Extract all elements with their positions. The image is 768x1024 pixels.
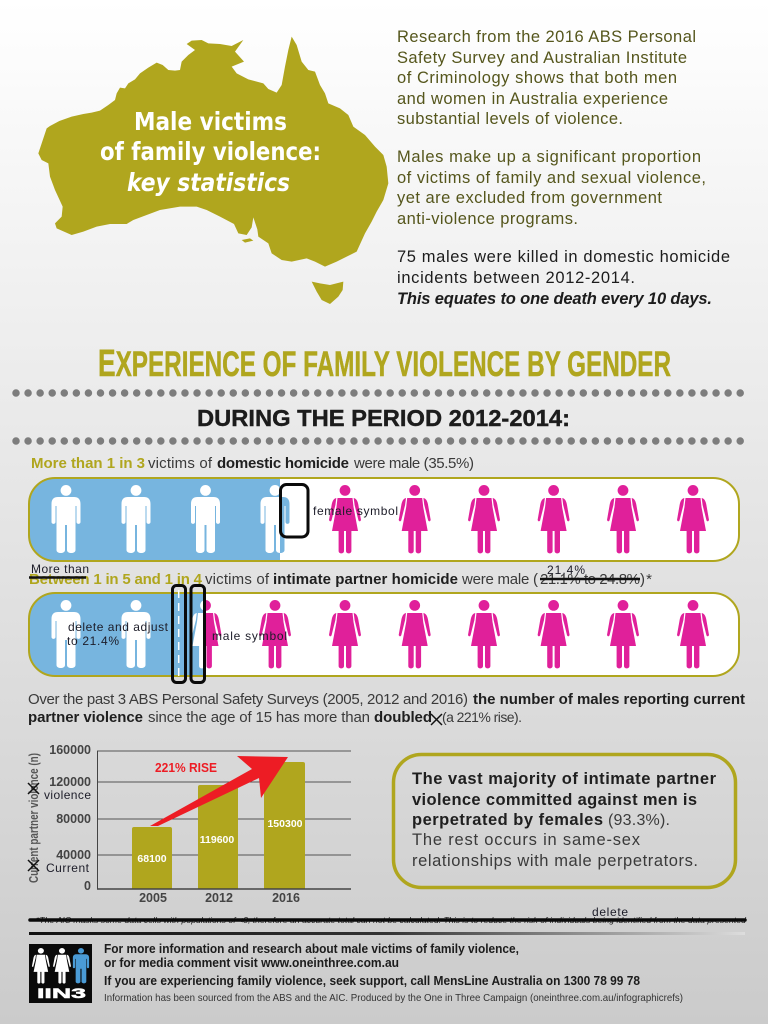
arrow: rise bbox=[150, 756, 288, 826]
paragraph: research: Safety Survey and Australian Institute bbox=[397, 49, 687, 67]
footer text: If you are experiencing family violence, seek support, call MensLine Australia on 1300 78 99 78 bbox=[104, 974, 640, 988]
statement: domestic homicide: were male (35.5%) bbox=[353, 455, 474, 472]
annotation: male symbol: male symbol bbox=[212, 629, 287, 643]
paragraph: research: substantial levels of violence. bbox=[397, 110, 623, 128]
text block: partner violence trend: doubled bbox=[374, 709, 432, 726]
statement: intimate partner homicide: 21.1% to 24.8% bbox=[540, 571, 640, 588]
footer text: or for media comment visit www.oneinthree.com.au bbox=[104, 956, 399, 970]
title: key statistics bbox=[127, 168, 290, 197]
annotation: delete and adjust: to 21.4% bbox=[67, 634, 119, 648]
paragraph: homicide statistic: 75 males were killed in domestic homicide bbox=[397, 248, 730, 266]
paragraph: homicide statistic bbox=[397, 248, 730, 308]
bars bbox=[132, 762, 305, 889]
y axis labels: 160000 bbox=[49, 743, 91, 757]
logo: One in Three bbox=[29, 944, 92, 1003]
statement: intimate partner homicide bbox=[29, 562, 652, 588]
paragraph: males: yet are excluded from government bbox=[397, 189, 662, 207]
paragraph: homicide statistic: This equates to one death every 10 days. bbox=[397, 290, 712, 308]
map of Australia with title bbox=[38, 37, 388, 304]
statement: domestic homicide: domestic homicide bbox=[217, 455, 349, 472]
y axis title: Current partner violence (n) bbox=[27, 753, 41, 883]
statement: intimate partner homicide: victims of bbox=[205, 571, 270, 588]
paragraph: males bbox=[397, 148, 706, 228]
footer text bbox=[104, 942, 683, 1004]
bar chart: current partner violence bbox=[27, 743, 351, 905]
logo wordmark: IIN3 bbox=[37, 985, 86, 1001]
annotation: delete and adjust: delete and adjust bbox=[68, 620, 169, 634]
x axis labels: 2012 bbox=[205, 891, 233, 905]
annotation: More than: More than bbox=[31, 562, 89, 576]
statement: intimate partner homicide: )* bbox=[640, 571, 652, 588]
title: of family violence: bbox=[100, 137, 321, 166]
panel: domestic homicide pictogram bbox=[29, 478, 739, 561]
y axis labels: 0 bbox=[84, 879, 91, 893]
callout: perpetrators: perpetrated by females bbox=[412, 811, 603, 829]
y axis labels bbox=[49, 743, 91, 893]
icon: Australia map bbox=[38, 37, 388, 304]
paragraph: research bbox=[397, 28, 696, 128]
x axis labels: 2005 bbox=[139, 891, 167, 905]
paragraph: research: of Criminology shows that both men bbox=[397, 69, 677, 87]
statement: domestic homicide bbox=[31, 455, 474, 472]
annotation: female symbol: female symbol bbox=[313, 504, 398, 518]
callout: perpetrators: relationships with male perpetrators. bbox=[412, 852, 698, 870]
icons: female figures bbox=[329, 485, 709, 553]
heading: during the period: DURING THE PERIOD 2012-2014: bbox=[197, 405, 570, 431]
icon: female figures bbox=[32, 948, 71, 984]
panel: intimate partner homicide pictogram bbox=[29, 586, 739, 682]
callout: perpetrators bbox=[394, 754, 736, 888]
paragraph: males: anti-violence programs. bbox=[397, 210, 578, 228]
mark: crosses bbox=[28, 783, 39, 871]
paragraph: research: and women in Australia experience bbox=[397, 90, 668, 108]
paragraph: homicide statistic: incidents between 2012-2014. bbox=[397, 269, 635, 287]
paragraph: males: Males make up a significant proportion bbox=[397, 148, 701, 166]
paragraph: males: of victims of family and sexual violence, bbox=[397, 169, 706, 187]
annotation: delete and adjust bbox=[67, 620, 169, 648]
label: 221% rise: 221% RISE bbox=[155, 761, 217, 775]
annotation box bbox=[280, 484, 308, 537]
annotation boxes bbox=[172, 586, 204, 682]
intro text block bbox=[397, 28, 730, 308]
paragraph: research: Research from the 2016 ABS Personal bbox=[397, 28, 696, 46]
statement: domestic homicide: More than 1 in 3 bbox=[31, 455, 145, 472]
x axis labels: 2016 bbox=[272, 891, 300, 905]
statement: intimate partner homicide: intimate partner homicide bbox=[273, 571, 458, 588]
y axis labels: 120000 bbox=[49, 775, 91, 789]
grid lines bbox=[97, 751, 351, 855]
annotation: delete: delete bbox=[592, 905, 628, 919]
text block: partner violence trend: partner violence bbox=[28, 709, 143, 726]
text block: partner violence trend bbox=[28, 691, 745, 726]
footnote, struck through bbox=[30, 905, 746, 925]
bar values bbox=[137, 818, 303, 865]
icons: male figures bbox=[52, 590, 203, 676]
bar values: 119600 bbox=[200, 834, 234, 846]
title: Male victims bbox=[134, 107, 287, 136]
icons: male figures bbox=[52, 485, 290, 553]
bar values: 150300 bbox=[267, 818, 303, 830]
annotation: Current: Current bbox=[46, 861, 90, 875]
footnote, struck through: *The AIC masks some data cells with populations of <3, therefore an accurate total can not be calculated. This is to reduce the risk of individuals being identified from the data presented bbox=[36, 915, 746, 925]
footer text: For more information and research about male victims of family violence, bbox=[104, 942, 519, 956]
callout: perpetrators: (93.3%). bbox=[608, 812, 670, 829]
callout: perpetrators: The rest occurs in same-sex bbox=[412, 831, 641, 849]
text block: partner violence trend: since the age of 15 has more than bbox=[148, 709, 370, 726]
footer text: Information has been sourced from the ABS and the AIC. Produced by the One in Three Campaign (oneinthree.com.au/infographicrefs) bbox=[104, 992, 683, 1004]
x axis labels bbox=[139, 891, 300, 905]
y axis labels: 40000 bbox=[56, 848, 91, 862]
text block: partner violence trend: Over the past 3 ABS Personal Safety Surveys (2005, 2012 and 2016) bbox=[28, 691, 468, 708]
statement: intimate partner homicide: were male ( bbox=[461, 571, 538, 588]
icon: male figure bbox=[73, 948, 89, 983]
statement: intimate partner homicide: Between 1 in 5 and 1 in 4 bbox=[29, 571, 203, 588]
text block: partner violence trend: the number of males reporting current bbox=[473, 691, 745, 708]
annotation: 21.4%: 21.4% bbox=[547, 563, 585, 577]
y axis labels: 80000 bbox=[56, 812, 91, 826]
bar values: 68100 bbox=[137, 853, 167, 865]
icons: female figures bbox=[190, 600, 709, 668]
title bbox=[100, 107, 321, 197]
mark: cross bbox=[431, 714, 442, 725]
text block: partner violence trend: (a 221% rise). bbox=[442, 709, 522, 725]
annotation: violence: violence bbox=[44, 788, 91, 802]
callout: perpetrators: violence committed against men is bbox=[412, 791, 697, 809]
statement: domestic homicide: victims of bbox=[148, 455, 213, 472]
callout: perpetrators: The vast majority of intimate partner bbox=[412, 770, 717, 788]
